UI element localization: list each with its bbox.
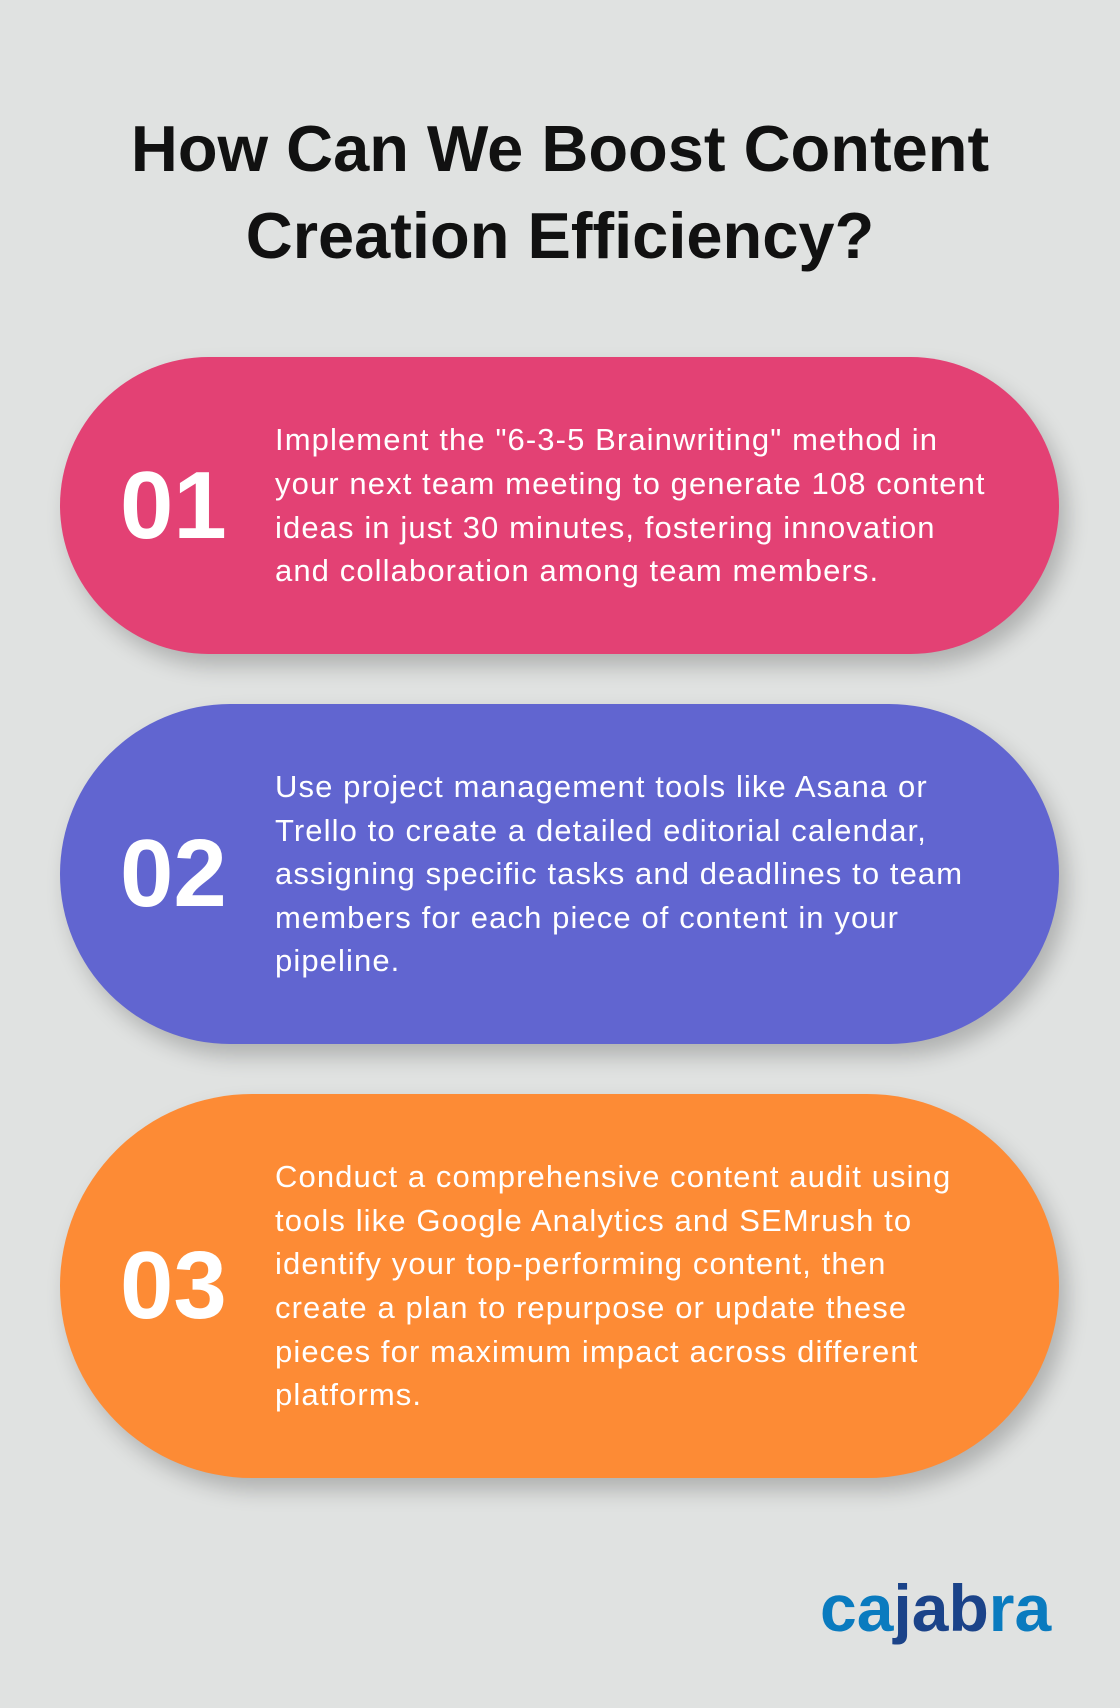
text 03: tools like Google Analytics and SEMrush to <box>275 1203 912 1238</box>
text 02: pipeline. <box>275 943 400 978</box>
title: How Can We Boost Content <box>131 112 989 185</box>
text 01: and collaboration among team members. <box>275 553 879 588</box>
text 03: identify your top-performing content, then <box>275 1246 886 1281</box>
number 01: 01 <box>120 452 227 558</box>
text 02: assigning specific tasks and deadlines to team <box>275 856 963 891</box>
number 03: 03 <box>120 1232 227 1339</box>
text 02: Use project management tools like Asana or <box>275 769 928 804</box>
text 02 <box>275 769 963 978</box>
panel: step 02 <box>60 704 1059 1044</box>
panel: step 01 <box>60 357 1059 654</box>
text 03: pieces for maximum impact across different <box>275 1334 918 1369</box>
text 01: ideas in just 30 minutes, fostering innovation <box>275 510 936 544</box>
title: Creation Efficiency? <box>246 199 874 272</box>
panel: step 03 <box>60 1094 1059 1478</box>
logo: cajabra <box>820 1571 1051 1645</box>
text 03: Conduct a comprehensive content audit using <box>275 1159 951 1194</box>
text 03: platforms. <box>275 1377 422 1412</box>
number 02: 02 <box>120 820 227 927</box>
text 03: create a plan to repurpose or update these <box>275 1290 907 1325</box>
text 01: Implement the "6-3-5 Brainwriting" method in <box>275 422 938 457</box>
title <box>131 112 989 272</box>
text 02: members for each piece of content in your <box>275 900 899 935</box>
text 03 <box>275 1159 951 1412</box>
text 02: Trello to create a detailed editorial calendar, <box>275 813 927 848</box>
text 01 <box>275 422 986 588</box>
text 01: your next team meeting to generate 108 content <box>275 466 986 501</box>
